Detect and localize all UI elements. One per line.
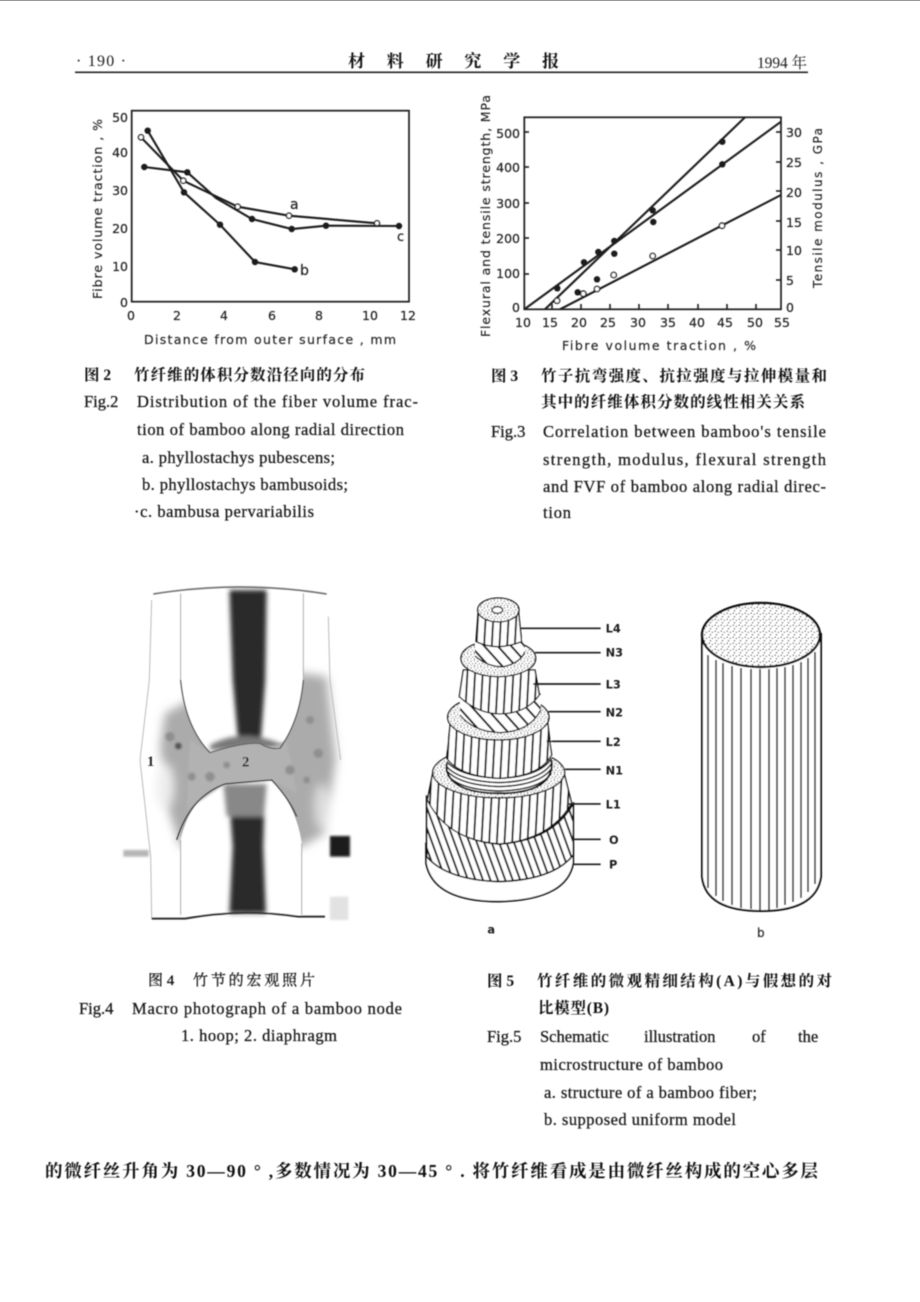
caption: figure 5: 图 5 [487, 972, 514, 990]
caption: figure 2: Fig.2 [84, 392, 118, 411]
caption: figure 3 [491, 366, 827, 522]
caption: figure 4: 1. hoop; 2. diaphragm [181, 1026, 337, 1045]
x axis labels: 2 [173, 308, 181, 323]
caption: figure 3: 竹子抗弯强度、抗拉强度与拉伸模量和 [541, 366, 827, 385]
caption: figure 2: tion of bamboo along radial direction [137, 420, 404, 439]
caption: figure 3: Correlation between bamboo's tensile [543, 422, 826, 441]
x axis title: Distance from outer surface , mm [144, 332, 396, 347]
page number: · 190 · [76, 53, 126, 70]
page header [75, 51, 808, 73]
caption: figure 5: the [798, 1027, 818, 1046]
caption: figure 5: illustration [644, 1027, 716, 1046]
y axis labels: 50 [112, 110, 128, 125]
photograph: bamboo node [123, 587, 350, 920]
bottom axis labels: 55 [774, 315, 790, 330]
bottom axis labels: 10 [515, 315, 531, 330]
left axis labels: 0 [512, 300, 520, 315]
clamp and shadow marks [123, 836, 350, 920]
line chart: fibre volume fraction vs distance [90, 110, 416, 347]
caption: figure 5: Fig.5 [487, 1027, 521, 1046]
left axis labels [496, 126, 529, 315]
caption: figure 3: and FVF of bamboo along radial direc- [543, 477, 826, 496]
y axis labels: 30 [112, 183, 128, 198]
right axis labels [776, 125, 802, 315]
right axis labels: 15 [786, 215, 802, 230]
caption: figure 5: 竹纤维的微观精细结构(A)与假想的对 [537, 971, 832, 990]
journal title: 材 料 研 究 学 报 [348, 51, 559, 71]
x axis labels [127, 308, 416, 323]
caption: figure 2: 图 2 [84, 366, 111, 384]
caption: figure 4: 图 4 [148, 972, 175, 989]
right axis title: Tensile modulus , GPa [811, 128, 825, 289]
series c [141, 164, 404, 245]
layer L3 [459, 670, 539, 714]
N2 stippled disc [448, 695, 549, 740]
layer labels and leader lines: L3 [606, 678, 621, 692]
y axis title: Fibre volume traction , % [90, 119, 105, 299]
left axis title: Flexural and tensile strength, MPa [478, 95, 493, 337]
caption: figure 3: tion [543, 503, 571, 522]
caption: figure 4: Macro photograph of a bamboo node [132, 999, 402, 1018]
right axis labels: 20 [786, 185, 802, 200]
series b: b [300, 263, 309, 279]
caption: figure 2 [84, 365, 418, 521]
caption: figure 2: b. phyllostachys bambusoids; [142, 475, 348, 494]
x axis title: Fibre volume traction , % [562, 338, 756, 353]
layer labels and leader lines [521, 621, 623, 872]
series b [144, 128, 309, 279]
diagram a: layered bamboo fibre model [426, 598, 623, 936]
bottom axis labels: 25 [600, 315, 616, 330]
node tissue, soft outer edge [156, 673, 336, 847]
label b: b [757, 926, 765, 940]
N1 stippled ring [433, 747, 565, 798]
bottom axis labels: 45 [717, 315, 733, 330]
caption: figure 4 [79, 971, 402, 1045]
right axis labels: 25 [786, 155, 802, 170]
layer L4 [476, 610, 522, 647]
stippled top end [702, 603, 820, 667]
layer labels and leader lines: L4 [606, 621, 621, 635]
y axis labels: 10 [112, 259, 128, 274]
N3 stippled disc [461, 640, 536, 677]
modulus fitted line [560, 195, 781, 309]
layer L1 [427, 770, 572, 844]
bottom axis labels: 40 [689, 315, 705, 330]
right axis labels: 10 [786, 243, 802, 258]
left axis labels: 300 [496, 196, 520, 211]
steep fitted line [545, 117, 745, 309]
y axis labels: 0 [120, 295, 128, 310]
caption: figure 3: Fig.3 [491, 422, 525, 441]
layer labels and leader lines: P [609, 858, 617, 872]
series c: c [397, 230, 404, 245]
caption: figure 2: a. phyllostachys pubescens; [142, 448, 335, 467]
bottom axis labels: 20 [571, 315, 587, 330]
series a: a [290, 197, 299, 213]
layer labels and leader lines: N1 [606, 763, 623, 777]
diagram b: supposed uniform model cylinder [702, 603, 821, 940]
right axis labels: 30 [786, 125, 802, 140]
x axis labels: 4 [220, 308, 228, 323]
x axis labels: 6 [268, 308, 276, 323]
bottom axis labels: 15 [542, 315, 558, 330]
y axis labels: 40 [112, 145, 128, 160]
layer L2 [447, 720, 552, 778]
left axis labels: 400 [496, 160, 520, 175]
label 2 diaphragm: 2 [242, 755, 249, 771]
layer labels and leader lines: L2 [606, 735, 621, 749]
layer labels and leader lines: N2 [606, 706, 623, 720]
year: 1994 年 [757, 53, 807, 72]
x axis labels: 10 [362, 308, 378, 323]
left axis labels: 100 [496, 266, 520, 281]
tissue mottling [165, 716, 323, 783]
bottom axis labels: 30 [630, 315, 646, 330]
bottom axis labels [515, 304, 790, 330]
right axis labels: 5 [786, 273, 794, 288]
N1 coiled rings [447, 740, 552, 793]
caption: figure 3: strength, modulus, flexural strength [543, 450, 827, 469]
caption: figure 5 [487, 971, 832, 1129]
caption: figure 5: microstructure of bamboo [540, 1055, 723, 1074]
caption: figure 2: ·c. bambusa pervariabilis [134, 502, 314, 521]
N2 diagonal band [460, 693, 541, 733]
open data points [554, 223, 725, 303]
right axis labels: 0 [786, 300, 794, 315]
caption: figure 3: 其中的纤维体积分数的线性相关关系 [541, 392, 805, 411]
label a: a [487, 922, 495, 936]
dark background stripe [210, 590, 283, 913]
body text line: 的微纤丝升角为 30—90 ° ,多数情况为 30—45 ° . 将竹纤维看成是由微纤丝构成的空心多层 [45, 1161, 820, 1181]
caption: figure 5: Schematic [540, 1027, 609, 1046]
caption: figure 5: of [752, 1027, 766, 1046]
bottom axis labels: 35 [660, 315, 676, 330]
bottom axis labels: 50 [747, 315, 763, 330]
filled data points [554, 138, 726, 295]
x axis labels: 8 [315, 308, 323, 323]
layer labels and leader lines: N3 [606, 646, 623, 660]
y axis labels: 20 [112, 221, 128, 236]
caption: figure 4: Fig.4 [79, 999, 113, 1018]
top stippled end with hollow core [478, 598, 519, 622]
caption: figure 2: Distribution of the fiber volume frac- [137, 392, 418, 411]
caption: figure 2: 竹纤维的体积分数沿径向的分布 [134, 365, 365, 384]
caption: figure 5: b. supposed uniform model [544, 1110, 736, 1129]
x axis labels: 0 [127, 308, 135, 323]
line chart: strength and modulus vs fibre volume fraction [478, 95, 825, 353]
caption: figure 5: 比模型(B) [538, 998, 609, 1017]
top cavity [181, 592, 303, 753]
flexural fitted line [524, 122, 781, 309]
layer P base [426, 843, 573, 902]
caption: figure 5: a. structure of a bamboo fiber; [544, 1083, 757, 1102]
series a [138, 135, 380, 226]
caption: figure 3: 图 3 [491, 367, 518, 385]
vertical fibre lines [708, 652, 815, 910]
layer labels and leader lines: O [609, 833, 619, 847]
bottom cavity [181, 780, 302, 915]
x axis labels: 12 [400, 308, 416, 323]
layer labels and leader lines: L1 [606, 798, 621, 812]
caption: figure 4: 竹节的宏观照片 [193, 971, 315, 989]
layer O [427, 797, 573, 882]
N3 diagonal band [475, 638, 525, 667]
left axis labels: 200 [496, 231, 520, 246]
y axis labels [112, 110, 128, 310]
diaphragm band [187, 740, 297, 810]
label 1 hoop: 1 [147, 754, 154, 770]
left axis labels: 500 [496, 126, 520, 141]
